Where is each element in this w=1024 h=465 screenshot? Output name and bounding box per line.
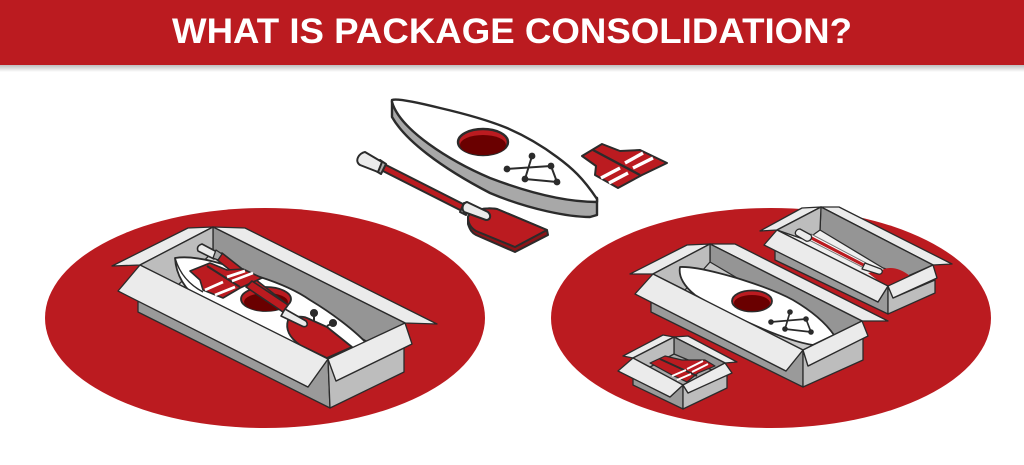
red circle: left: [45, 208, 485, 428]
box body: [633, 373, 727, 409]
box: vest package: [618, 335, 737, 409]
box interior: [777, 207, 933, 286]
icon: paddle: [357, 152, 548, 252]
box interior: [633, 337, 725, 385]
vest in box: [650, 356, 715, 382]
box: large kayak package: [630, 244, 888, 387]
cockpit: [732, 290, 772, 312]
front flaps: [618, 358, 732, 397]
title: WHAT IS PACKAGE CONSOLIDATION?: [172, 12, 852, 51]
icon: life vest: [582, 144, 667, 188]
back flaps: [112, 227, 437, 324]
packed items: [175, 244, 370, 365]
packed rigging: [311, 310, 336, 326]
box: all-in-one package: [112, 227, 437, 408]
header band: [0, 0, 1024, 72]
kayak rigging: [504, 153, 560, 185]
paddle in box: [795, 229, 910, 288]
icon: kayak: [392, 100, 597, 217]
back flaps: [630, 244, 888, 321]
front flaps: [764, 230, 937, 302]
box body: [651, 302, 863, 387]
packed paddle over vest: [246, 281, 288, 312]
box body: [775, 250, 935, 314]
box body: [138, 301, 404, 408]
box interior: [653, 244, 862, 350]
red circle: right: [551, 208, 991, 428]
front flaps: [118, 265, 412, 387]
kayak in box: [680, 267, 834, 345]
box interior: [140, 227, 405, 359]
box: paddle package: [760, 207, 952, 314]
back flaps: [760, 207, 952, 265]
rigging: [768, 309, 814, 335]
packed vest: [190, 263, 262, 298]
packed kayak: [174, 256, 365, 347]
packed cockpit: [241, 287, 291, 311]
front flaps: [635, 274, 868, 371]
kayak cockpit: [458, 129, 508, 155]
back flaps: [623, 335, 737, 363]
packed paddle shaft: [216, 253, 288, 312]
